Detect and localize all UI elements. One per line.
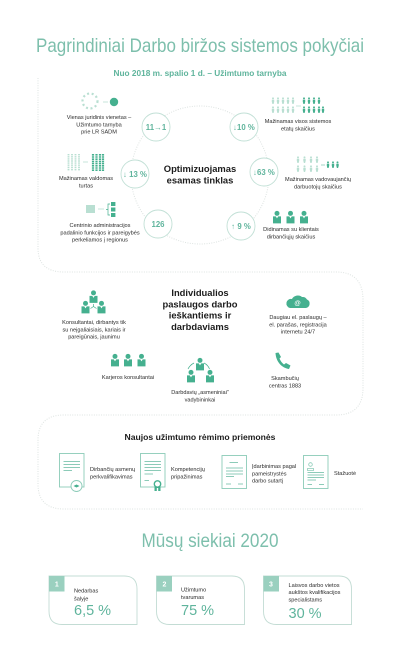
icon: certificate with cap	[60, 454, 84, 492]
text: more e-services: el. parašas, registracija	[269, 322, 328, 328]
heading: individual services: paslaugos darbo	[162, 298, 238, 309]
badge: 11 to 1	[142, 113, 170, 141]
text: recognition of competences: Kompetencijų	[171, 467, 205, 473]
text: managers reduced: darbuotojų skaičius	[294, 184, 342, 190]
text: requalification: perkvalifikavimas	[90, 474, 133, 480]
panel: optimised network	[59, 94, 351, 244]
text: personal managers: Darbdavių „asmeniniai“	[171, 390, 229, 396]
text: internship: Stažuotė	[334, 471, 356, 477]
badge: 126: 126	[151, 220, 165, 229]
text: call centre: Skambučių	[271, 376, 299, 382]
heading: individual services: Individualios	[171, 287, 229, 298]
text: assets reduced: Mažinamas valdomas	[59, 176, 113, 182]
text: client-facing staff: Didinamas su klientais	[263, 227, 319, 233]
text: apprenticeship contract: Įdarbinimas pagal	[252, 464, 296, 470]
card: employment sustainability: 75 %	[181, 603, 214, 619]
text: more e-services: internetu 24/7	[281, 330, 315, 336]
heading: support measures: Naujos užimtumo rėmimo priemonės	[125, 432, 276, 442]
icon: staff reduced	[272, 97, 324, 113]
card: high qualification vacancies: aukštos kvalifikacijos	[288, 590, 341, 596]
text: personal managers: vadybininkai	[185, 397, 215, 403]
text: more e-services: Daugiau el. paslaugų –	[269, 315, 327, 321]
text: consultants group: pareigūnais, jaunimu	[68, 335, 120, 341]
text: client-facing staff: dirbančiųjų skaičius	[267, 234, 315, 240]
badge: minus 13 percent	[121, 160, 149, 188]
text: one legal entity: Vienas juridinis vienetas –	[67, 115, 132, 121]
icon: personal managers	[187, 358, 214, 382]
text: central administration functions: perkeliamos į regionus	[72, 238, 128, 244]
card: employment sustainability	[156, 576, 244, 624]
text: requalification: Dirbančių asmenų	[90, 467, 135, 473]
card: high qualification vacancies	[264, 576, 352, 624]
badge: minus 13 percent: ↓ 13 %	[123, 170, 147, 179]
card: employment sustainability: Užimtumo	[181, 588, 206, 594]
panel: individual services	[62, 287, 328, 403]
card: employment sustainability: tvarumas	[181, 595, 204, 601]
card: employment sustainability: 2	[163, 582, 167, 588]
icon: client-facing staff	[273, 211, 308, 223]
text: recognition of competences: pripažinimas	[171, 474, 203, 480]
icon: cloud at sign	[286, 295, 310, 308]
heading: network: Optimizuojamas	[164, 163, 236, 174]
badge: 11 to 1: 11→1	[146, 123, 167, 132]
card: high qualification vacancies: Laisvos darbo vietos	[288, 583, 340, 589]
text: managers reduced: Mažinamas vadovaujančių	[285, 177, 351, 183]
badge: minus 10 percent	[230, 113, 258, 141]
card: high qualification vacancies: 30 %	[288, 606, 322, 622]
heading: network: esamas tinklas	[167, 174, 233, 186]
text: central administration functions: Centrinio administracijos	[70, 223, 131, 229]
card: unemployment: 6,5 %	[74, 603, 111, 619]
card: unemployment: Nedarbas	[74, 588, 98, 594]
dotted network ring	[131, 106, 269, 244]
card: high qualification vacancies: specialistams	[288, 597, 322, 603]
badge: plus 9 percent	[227, 212, 255, 240]
text: central administration functions: padalinio funkcijos ir pareigybės	[60, 230, 140, 236]
text: consultants group: su neįgaliaisiais, kariais ir	[62, 327, 126, 333]
badge: plus 9 percent: ↑ 9 %	[231, 222, 251, 231]
badge: minus 63 percent	[250, 158, 278, 186]
text: staff reduced: Mažinamas visos sistemos	[265, 119, 331, 125]
text: staff reduced: etatų skaičius	[281, 126, 315, 132]
dotted frame connecting the sections	[38, 78, 363, 509]
icon: central administration functions	[86, 202, 115, 217]
icon: phone	[276, 352, 290, 369]
icon: certificate with seal	[140, 454, 165, 491]
icon: career consultants	[111, 354, 146, 366]
text: apprenticeship contract: pameistrystės	[252, 471, 287, 477]
badge: 126	[144, 210, 172, 238]
heading: individual services: ieškantiems ir	[169, 310, 232, 321]
icon: apprenticeship contract	[222, 456, 246, 488]
heading: individual services: darbdaviams	[171, 321, 229, 332]
text: one legal entity: prie LR SADM	[81, 130, 117, 136]
card: unemployment: 1	[55, 582, 59, 588]
icon: one legal entity	[82, 94, 118, 108]
icon: consultants group	[82, 290, 106, 313]
panel: new employment support measures	[60, 432, 356, 492]
text: consultants group: Konsultantai, dirbantys tik	[62, 320, 126, 326]
text: career consultants: Karjeros konsultantai	[102, 375, 154, 381]
card: unemployment	[49, 576, 137, 624]
text: apprenticeship contract: darbo sutartį	[252, 479, 284, 485]
text: call centre: centras 1883	[269, 383, 301, 389]
icon: internship document	[304, 456, 328, 488]
card: unemployment: šalyje	[74, 596, 88, 602]
text: assets reduced: turtas	[79, 183, 93, 189]
text: one legal entity: Užimtumo tarnyba	[76, 122, 123, 128]
badge: minus 63 percent: ↓63 %	[253, 168, 275, 177]
subtitle: Nuo 2018 m. spalio 1 d. – Užimtumo tarnyba	[114, 68, 287, 78]
card: high qualification vacancies: 3	[269, 582, 273, 588]
icon: managers reduced	[297, 156, 339, 172]
icon: assets reduced	[68, 154, 103, 171]
heading: our goals 2020: Mūsų siekiai 2020	[142, 531, 278, 552]
badge: minus 10 percent: ↓10 %	[233, 123, 255, 132]
icon: cloud at sign: @	[294, 300, 301, 307]
